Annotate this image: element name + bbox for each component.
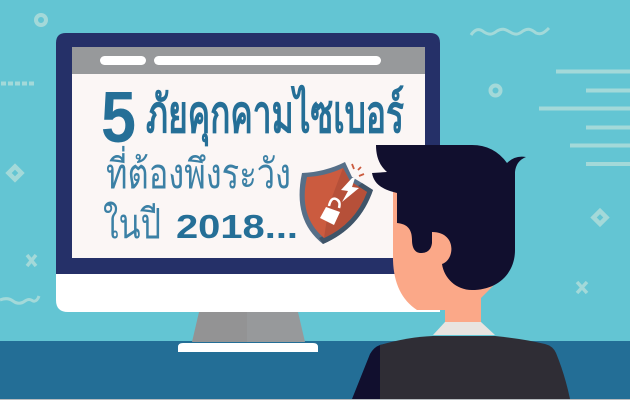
screen [72, 47, 425, 258]
decorative background shapes [0, 15, 630, 303]
icon: broken shield with padlock [300, 162, 373, 244]
lightning bolt [341, 178, 359, 202]
icon: ring top left [36, 15, 46, 25]
stand base [178, 343, 318, 352]
title [101, 78, 404, 247]
numeral 5: 5 [101, 78, 136, 158]
icon: ring right [490, 86, 500, 96]
icon: cross right [577, 282, 587, 293]
crack sparks [352, 164, 364, 176]
icon: cross left [27, 255, 36, 266]
icon: diamond right [594, 211, 606, 224]
monitor stand [178, 312, 318, 352]
monitor navy bezel [56, 33, 440, 274]
neck and face [393, 190, 497, 322]
hair [372, 145, 526, 290]
monitor white chin [56, 270, 440, 312]
icon: diamond left [8, 166, 22, 180]
title line 1: ภัยคุกคามไซเบอร์ [146, 84, 404, 147]
dashed line left [1, 82, 36, 86]
title line 3 thai: ในปี [103, 201, 161, 247]
title line 2: ที่ต้องพึงระวัง [106, 146, 291, 197]
bottom edge [0, 399, 630, 400]
horizontal speed lines [539, 72, 630, 164]
shirt collar [433, 322, 495, 335]
person [352, 145, 570, 399]
monitor [56, 33, 440, 312]
padlock [320, 207, 340, 225]
browser toolbar [72, 47, 425, 74]
wavy line left [0, 296, 39, 303]
jacket [352, 336, 570, 399]
desk [0, 341, 630, 399]
title line 3 year: 2018... [176, 208, 298, 245]
wavy line top right [471, 28, 549, 35]
